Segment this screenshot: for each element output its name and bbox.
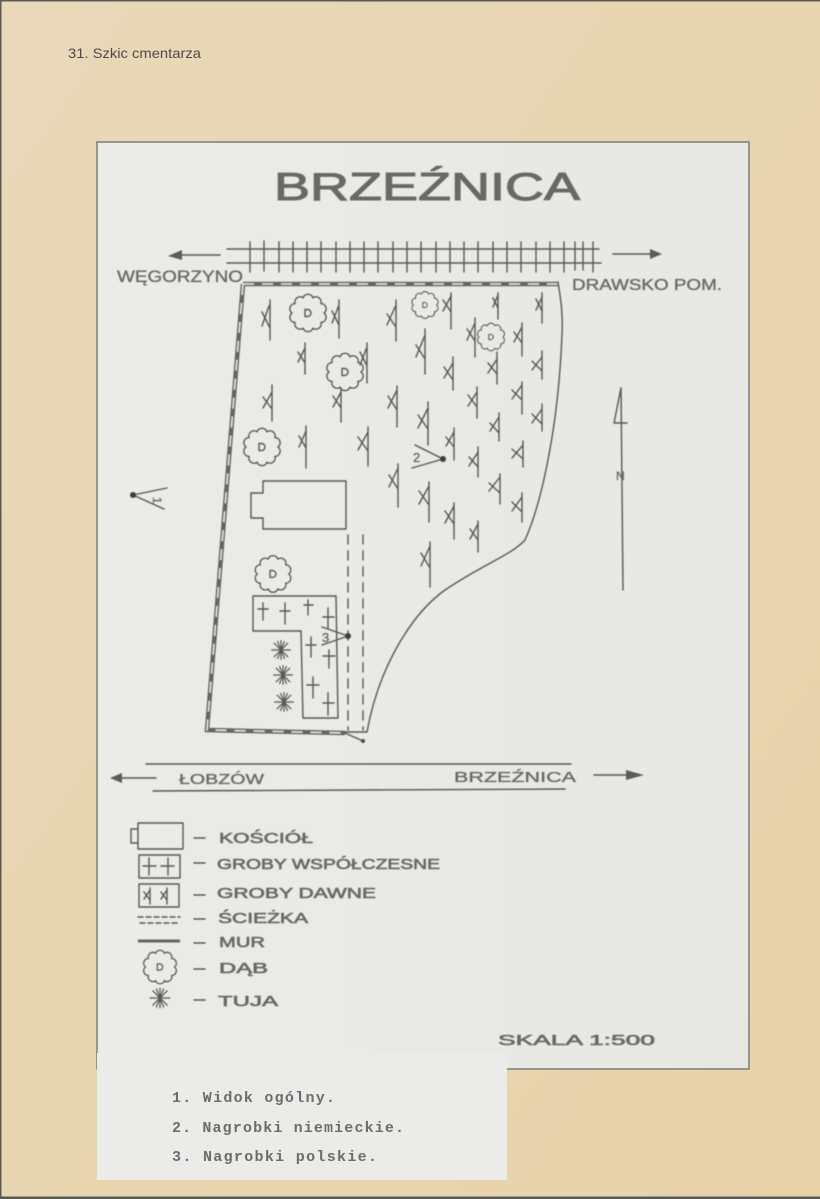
legend: church: [131, 823, 313, 849]
viewpoint 3: 3: [322, 630, 329, 645]
panel: typed caption slip: [97, 1053, 507, 1180]
cemetery wall: [207, 284, 558, 733]
label: Drawsko Pom.: DRAWSKO POM.: [572, 277, 722, 294]
viewpoint 3: [322, 627, 351, 645]
cemetery east boundary: [345, 282, 562, 732]
legend: thuja: [150, 988, 278, 1010]
title: BRZEŹNICA: BRZEŹNICA: [274, 166, 580, 209]
arrow: road east: [594, 770, 644, 780]
legend: church: KOŚCIÓŁ: [219, 829, 313, 847]
legend: old graves: [139, 884, 376, 907]
map drawing: [110, 166, 722, 1049]
caption: figure title: 31. Szkic cmentarza: [68, 45, 201, 61]
label: Łobzów: ŁOBZÓW: [179, 771, 265, 788]
arrow: railway west: [168, 250, 220, 260]
old graves: [262, 293, 542, 587]
label: Brzeźnica road: BRZEŹNICA: [454, 769, 576, 786]
path: gate spur: [345, 733, 365, 743]
legend: oak: DĄB: [219, 960, 268, 977]
scale label: SKALA 1:500: [498, 1032, 655, 1049]
legend: footpath: ŚCIEŻKA: [218, 909, 308, 927]
footpath: [348, 535, 363, 730]
north arrow: N: [616, 469, 625, 483]
legend: old graves: GROBY DAWNE: [217, 885, 376, 902]
railway track: [227, 241, 601, 272]
viewpoint 1: 1: [150, 497, 164, 504]
road: [146, 764, 571, 791]
modern graves plot: [253, 596, 338, 718]
legend: footpath: [138, 909, 308, 927]
church plan: [251, 481, 346, 529]
north arrow: [614, 388, 627, 590]
viewpoint 1: [130, 488, 167, 509]
legend: wall: MUR: [219, 934, 265, 951]
oak trees: [244, 292, 504, 592]
legend: thuja: TUJA: [218, 993, 278, 1010]
viewpoint 2: [412, 445, 446, 468]
legend: modern graves: GROBY WSPÓŁCZESNE: [217, 856, 440, 873]
legend: wall: [138, 934, 265, 951]
arrow: railway east: [613, 249, 662, 259]
typed line 3: 3. Nagrobki polskie.: [172, 1149, 377, 1166]
typed line 1: 1. Widok ogólny.: [172, 1090, 335, 1107]
arrow: road west: [110, 773, 156, 783]
modern grave crosses: [258, 600, 335, 715]
typed line 2: 2. Nagrobki niemieckie.: [172, 1120, 404, 1137]
legend: oak: [144, 950, 268, 984]
panel: map sheet: [97, 142, 749, 1069]
thuja trees: [272, 641, 293, 711]
legend: [131, 823, 440, 1010]
label: Węgorzyno: WĘGORZYNO: [117, 267, 243, 286]
viewpoint 2: 2: [413, 450, 420, 465]
legend: modern graves: [139, 855, 440, 878]
